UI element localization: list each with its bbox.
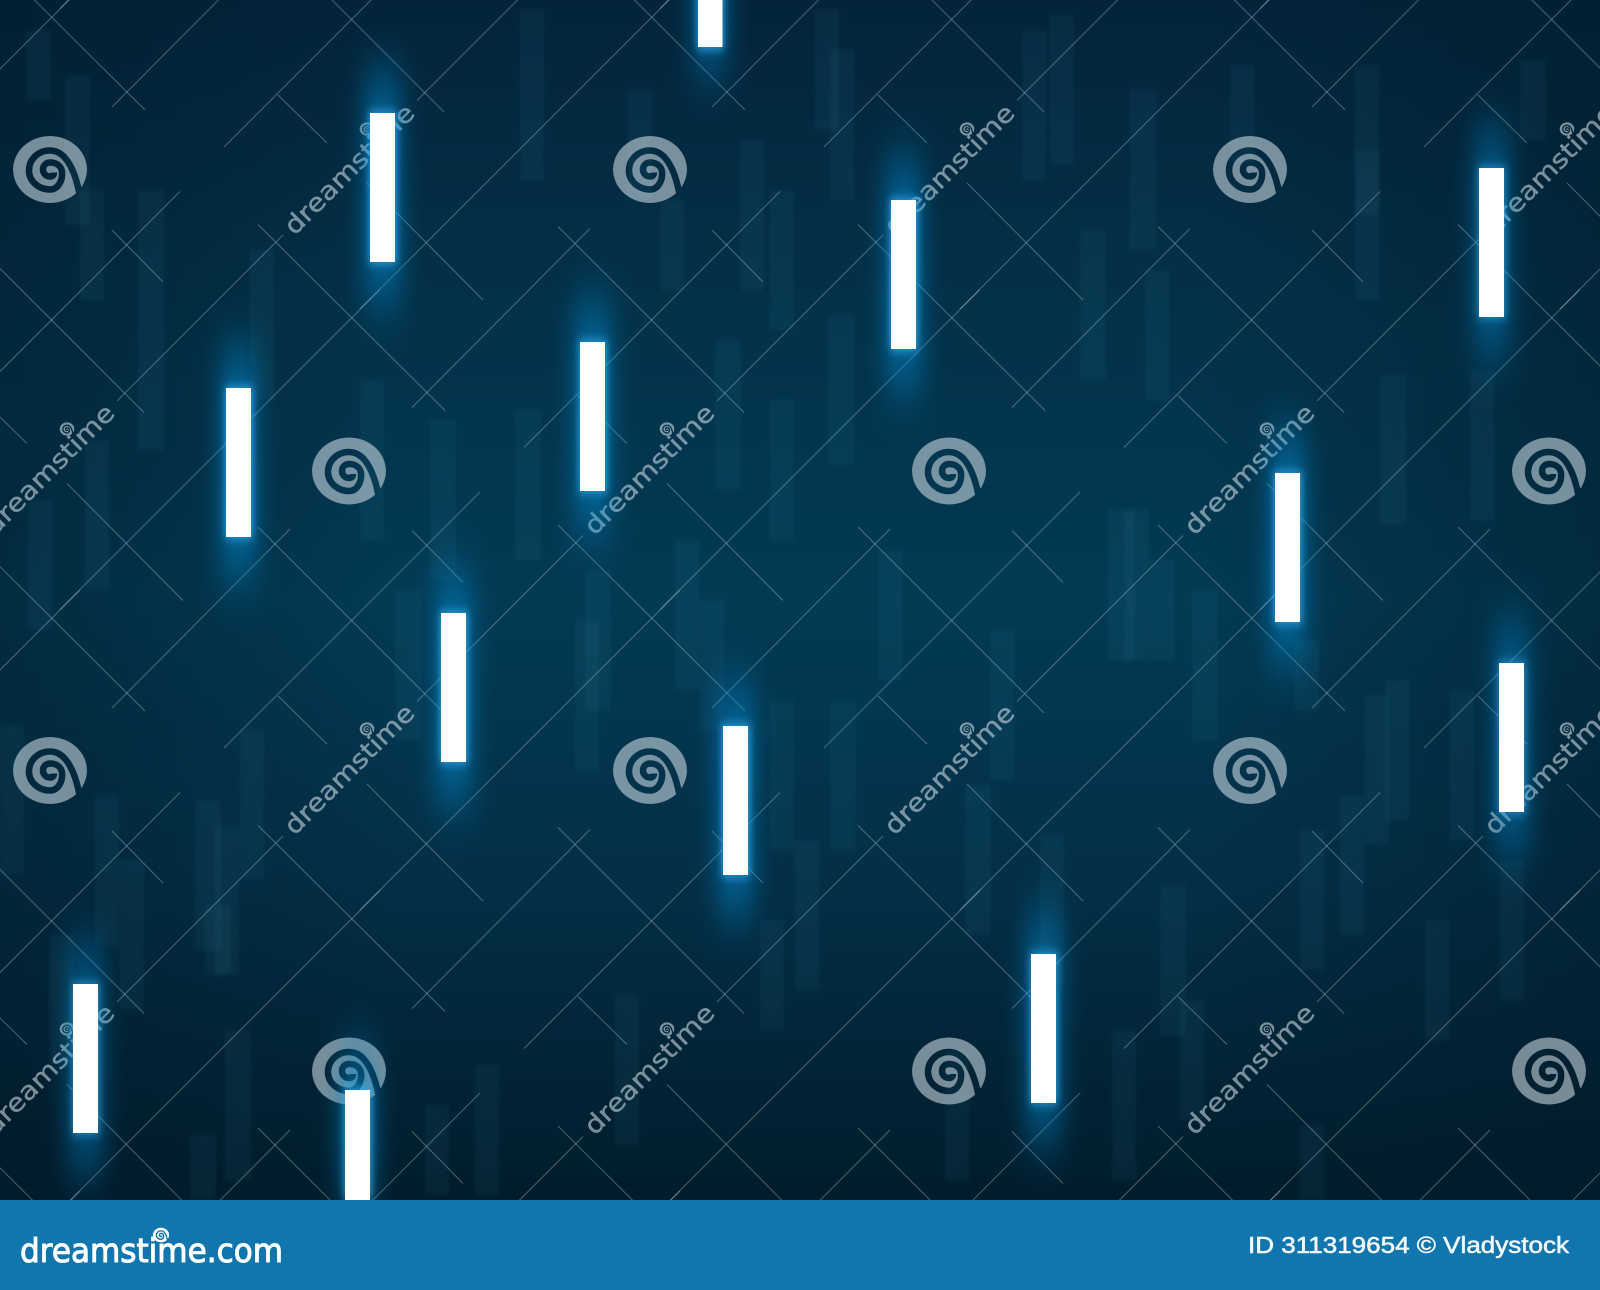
bar 2 bbox=[364, 75, 401, 300]
bar 6 bbox=[220, 350, 257, 575]
watermark wordmarks: dreamstime bbox=[1178, 398, 1320, 540]
watermark wordmarks: dreamstime bbox=[1178, 998, 1320, 1140]
bar 9 bbox=[1493, 625, 1530, 850]
watermark wordmarks: dreamstime bbox=[578, 998, 720, 1140]
footer logo: dreamstime.com bbox=[20, 1231, 283, 1270]
bar 12 bbox=[67, 946, 104, 1171]
bar 4 bbox=[1473, 130, 1510, 355]
footer bar bbox=[0, 1200, 1600, 1290]
bar 10 bbox=[717, 688, 754, 913]
bar 1 bbox=[692, 0, 728, 70]
watermark wordmarks: dreamstime bbox=[878, 698, 1020, 840]
watermark wordmarks: dreamstime bbox=[578, 398, 720, 540]
watermark spiral icons bbox=[13, 136, 1586, 1104]
bar 7 bbox=[1269, 435, 1306, 660]
bar 13 bbox=[339, 1052, 376, 1200]
watermark wordmarks: dreamstime bbox=[278, 698, 420, 840]
watermark wordmarks: dreamstime bbox=[278, 98, 420, 240]
watermark wordmarks: dreamstime bbox=[878, 98, 1020, 240]
image id and credit: ID 311319654 © Vladystock bbox=[1248, 1232, 1570, 1258]
bar 8 bbox=[435, 575, 472, 800]
bar 11 bbox=[1025, 916, 1062, 1141]
small watermark spirals on wordmarks bbox=[60, 122, 1574, 1036]
bar 5 bbox=[574, 304, 611, 529]
bar 3 bbox=[885, 162, 922, 387]
